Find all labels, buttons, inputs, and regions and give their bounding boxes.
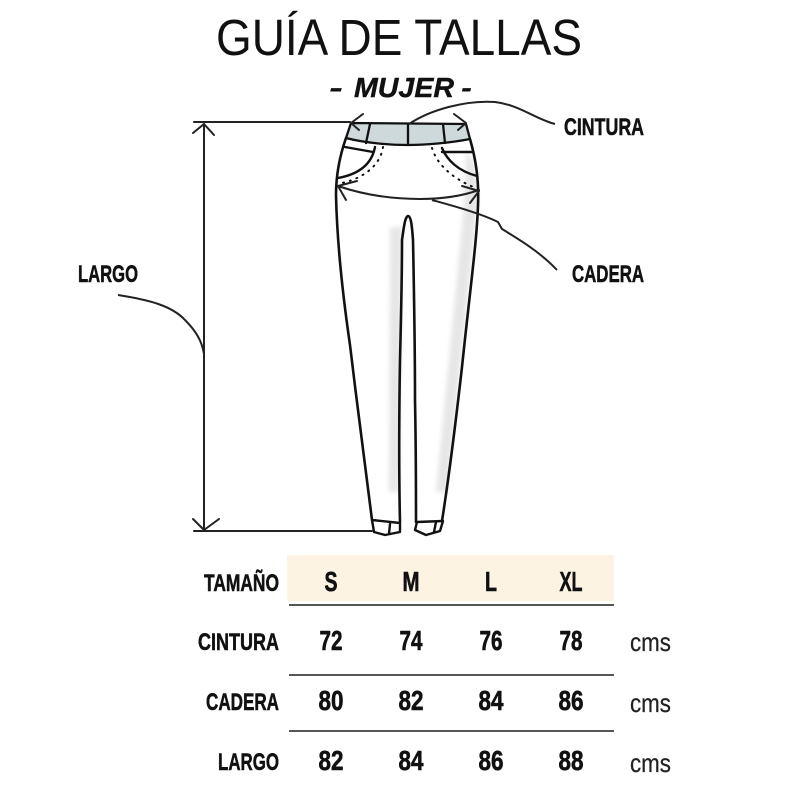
row: largo: cms (630, 748, 671, 778)
row: cadera: 80 (318, 685, 344, 716)
row: tamaño: TAMAÑO (204, 569, 279, 597)
label: largo: LARGO (78, 261, 138, 288)
row: cadera: 82 (398, 685, 424, 716)
subtitle (329, 72, 472, 103)
label: largo (78, 261, 204, 354)
row: cadera (206, 685, 671, 718)
subtitle: - (329, 72, 343, 103)
label: cadera (432, 200, 644, 288)
row: largo: 86 (478, 745, 504, 776)
label: cadera: CADERA (572, 261, 644, 288)
row: cintura: 74 (400, 625, 423, 656)
row: cintura (198, 625, 671, 657)
trouser outline (336, 138, 478, 522)
row dividers (289, 605, 614, 731)
title: GUÍA DE TALLAS (216, 9, 582, 66)
subtitle: - (461, 72, 472, 103)
row: tamaño: L (485, 566, 497, 597)
row: cintura: 78 (560, 625, 582, 656)
waist measurement arrows (351, 114, 466, 130)
row: cintura: 76 (480, 625, 502, 656)
subtitle: MUJER (354, 72, 455, 103)
row: cintura: CINTURA (198, 629, 279, 656)
waistband (346, 123, 470, 145)
row: tamaño: M (402, 566, 420, 597)
row: largo: 82 (318, 745, 344, 776)
row: largo: 88 (558, 745, 584, 776)
row: tamaño: XL (560, 566, 582, 597)
pockets (338, 147, 477, 178)
pocket stitching (342, 147, 476, 188)
left cuff (372, 520, 400, 535)
row: cadera: 84 (478, 685, 504, 716)
right cuff (415, 521, 443, 535)
row: cadera: cms (630, 688, 671, 718)
row: largo: LARGO (218, 749, 279, 776)
row: tamaño (204, 566, 582, 597)
row: largo (218, 745, 671, 778)
length measurement arrow (193, 122, 372, 531)
label: cintura: CINTURA (564, 114, 644, 141)
leg shading (389, 150, 478, 492)
row: cintura: cms (630, 627, 671, 657)
pants illustration (336, 123, 478, 535)
label: cintura (409, 102, 644, 141)
row: cintura: 72 (320, 625, 342, 656)
size table (198, 555, 671, 778)
row: largo: 84 (398, 745, 424, 776)
row: cadera: 86 (558, 685, 584, 716)
row: cadera: CADERA (206, 689, 279, 716)
hip measurement arrow (338, 181, 479, 203)
row: tamaño: S (324, 566, 338, 597)
header highlight (287, 555, 614, 601)
